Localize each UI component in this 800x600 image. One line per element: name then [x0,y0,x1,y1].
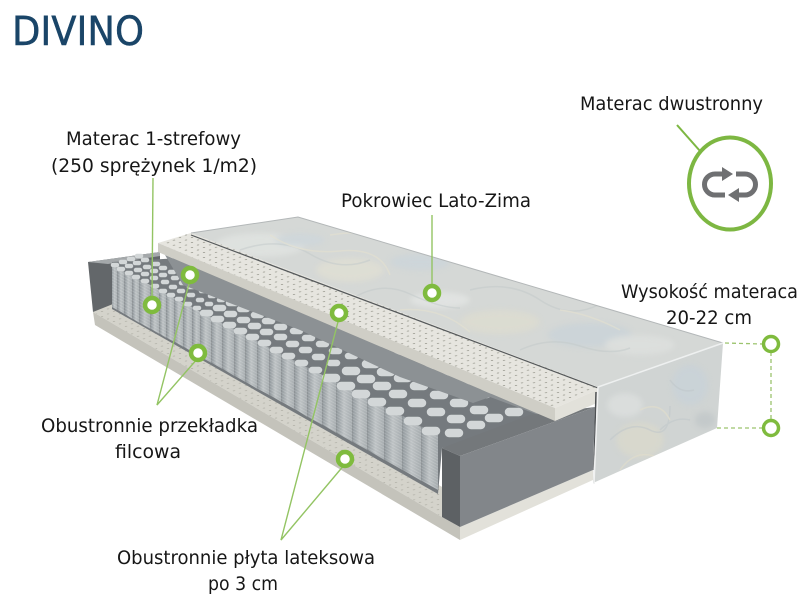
label: springs: Materac 1-strefowy [66,128,241,150]
spring fabric texture [112,265,438,490]
label: latex: po 3 cm [208,573,278,595]
label: felt: Obustronnie przekładka [41,415,258,437]
felt layer [165,255,555,421]
marker: upper latex [332,306,346,320]
label: height: 20-22 cm [666,307,752,329]
spring base shadow [112,258,595,494]
label: two-sided: Materac dwustronny [580,93,763,115]
marker: springs [145,298,159,312]
marker: height bottom [764,420,778,436]
bottom latex plate [93,304,593,540]
title: DIVINO [12,9,144,55]
marker: lower latex [338,452,352,466]
icon: two-sided mattress [689,138,771,230]
label: cover: Pokrowiec Lato-Zima [341,190,531,212]
height dimension dashes [717,343,771,428]
marker: upper felt [183,268,197,282]
label: felt: filcowa [115,441,181,463]
mattress cover side [593,343,723,484]
label: latex [117,547,375,595]
pocket springs [112,265,438,490]
label: height [621,281,798,329]
label: latex: Obustronnie płyta lateksowa [117,547,375,569]
leader lines [152,125,700,540]
mattress cover top [191,217,723,388]
marker: lower felt [191,346,205,360]
spring tops [113,256,519,433]
side foam block [442,407,595,527]
label: springs: (250 sprężynek 1/m2) [51,155,257,177]
back wall of foam frame [88,252,160,312]
marker: cover [425,286,439,300]
top latex plate [158,233,598,421]
marker: height top [764,336,778,352]
label: felt [41,415,258,463]
label: springs [51,128,257,177]
mattress illustration [88,217,723,540]
